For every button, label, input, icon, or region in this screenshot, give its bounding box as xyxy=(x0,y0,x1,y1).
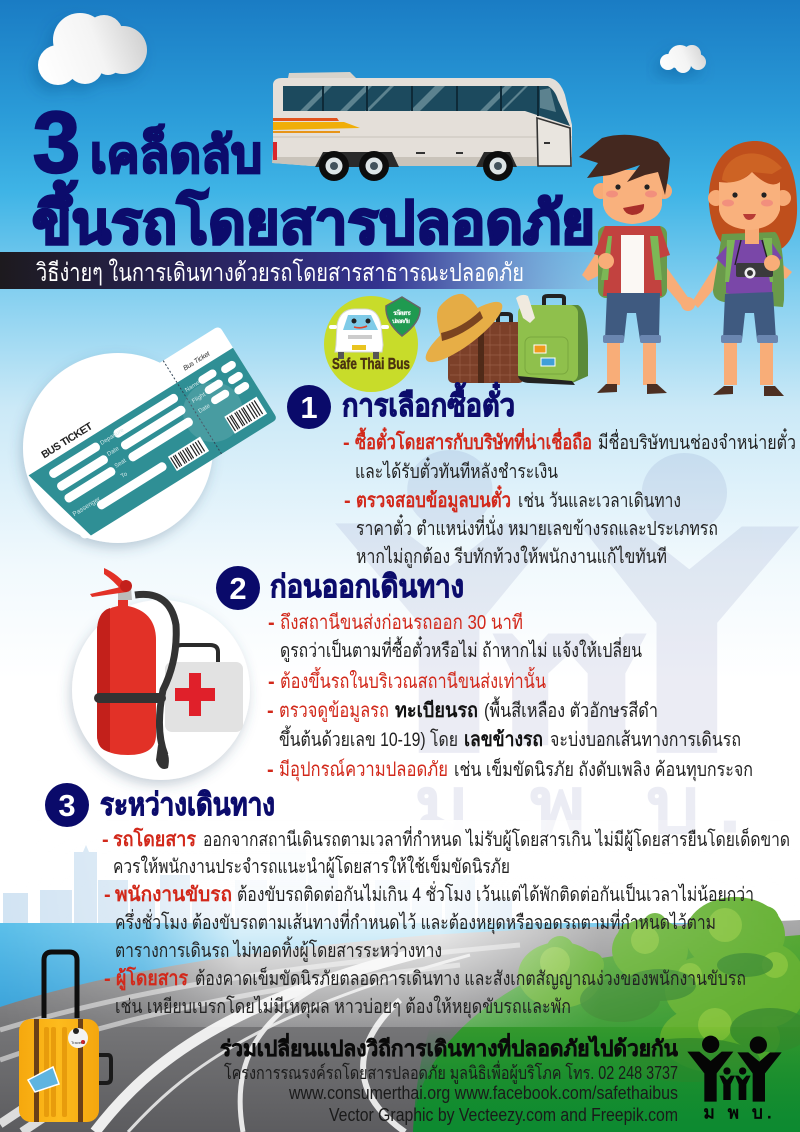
section 1 text: ราคาตั๋ว ตำแหน่งที่นั่ง หมายเลขข้างรถและประเภทรถ xyxy=(356,514,718,540)
section 1 text: เช่น วันและเวลาเดินทาง xyxy=(518,490,681,512)
safe thai bus logo: ปลอดภัย xyxy=(392,317,410,325)
section 3 text: ตารางการเดินรถ ไม่ทอดทิ้งผู้โดยสารระหว่างทาง xyxy=(115,936,442,963)
section 2 text xyxy=(267,612,753,782)
section 1 heading: การเลือกซื้อตั๋ว xyxy=(342,381,515,423)
cloud large xyxy=(38,13,147,85)
section 2 text: (พื้นสีเหลือง ตัวอักษรสีดำ xyxy=(484,696,658,722)
footer text: www.consumerthai.org www.facebook.com/safethaibus xyxy=(288,1083,678,1103)
subtitle band: วิธีง่ายๆ ในการเดินทางด้วยรถโดยสารสาธารณะปลอดภัย xyxy=(36,258,524,287)
section 2 text: - xyxy=(267,700,274,722)
ticket with white circle: Date xyxy=(106,446,121,458)
section 3 text: - xyxy=(104,968,111,990)
ticket with white circle: Departure xyxy=(100,427,126,447)
ticket with white circle: Date xyxy=(198,403,212,415)
title: เคล็ดลับ xyxy=(90,124,262,183)
section 3 text: รถโดยสาร xyxy=(113,827,196,851)
title: ขึ้นรถโดยสารปลอดภัย xyxy=(32,181,595,256)
section 2 text: ดูรถว่าเป็นตามที่ซื้อตั๋วหรือไม่ ถ้าหากไม่ แจ้งให้เปลี่ยน xyxy=(280,636,642,663)
section 2 text: มีอุปกรณ์ความปลอดภัย xyxy=(279,758,448,782)
section 2 text: ต้องขึ้นรถในบริเวณสถานีขนส่งเท่านั้น xyxy=(280,667,546,693)
ticket with white circle: BUS TICKET xyxy=(39,420,95,461)
section 2 heading: ก่อนออกเดินทาง xyxy=(270,569,464,604)
watermark logo xyxy=(335,450,799,850)
section 3 text: พนักงานขับรถ xyxy=(115,884,232,906)
yellow suitcase: Travel 2 xyxy=(71,1040,86,1045)
section 3 text: ควรให้พนักงานประจำรถแนะนำผู้โดยสารให้ใช้เข็มขัดนิรภัย xyxy=(113,854,510,879)
ticket with white circle: Flight xyxy=(191,392,207,405)
ticket with white circle: Name xyxy=(184,380,202,394)
ticket with white circle: Seat xyxy=(114,458,128,470)
bottom scene: sea, road and trees xyxy=(0,897,800,1132)
section 1 text: ซื้อตั๋วโดยสารกับบริษัทที่น่าเชื่อถือ xyxy=(355,427,592,454)
ticket with white circle: Passenger xyxy=(72,495,102,518)
bus illustration xyxy=(272,72,572,181)
title: 3 xyxy=(33,95,80,191)
section 3 heading: ระหว่างเดินทาง xyxy=(100,787,275,822)
safe thai bus logo xyxy=(324,296,420,392)
section 2 text: เลขข้างรถ xyxy=(464,728,543,751)
section 2 number badge xyxy=(216,566,260,610)
subtitle band xyxy=(0,252,610,289)
section 1 number badge: 1 xyxy=(300,390,318,425)
footer text: Vector Graphic by Vecteezy.com and Freepik.com xyxy=(329,1105,678,1125)
ticket with white circle: Bus Ticket xyxy=(182,350,212,372)
section 2 text: จะบ่งบอกเส้นทางการเดินรถ xyxy=(550,729,741,751)
ticket with white circle xyxy=(15,326,277,547)
section 3 text xyxy=(102,826,790,1019)
section 2 text: - xyxy=(268,612,275,634)
title xyxy=(32,95,595,256)
section 1 number badge xyxy=(287,385,331,429)
skyline xyxy=(3,838,512,925)
section 1 text xyxy=(343,427,796,569)
section 3 text: - xyxy=(104,884,111,906)
safe thai bus logo: รถโดยสาร xyxy=(393,309,412,317)
section 1 text: - xyxy=(343,432,350,454)
footer text xyxy=(220,1032,678,1125)
section 3 number badge: 3 xyxy=(58,788,76,823)
section 1 text: หากไม่ถูกต้อง รีบทักท้วงให้พนักงานแก้ไขทันที xyxy=(356,545,667,569)
boy character xyxy=(579,135,695,394)
section 2 text: - xyxy=(268,671,275,693)
footer text: ร่วมเปลี่ยนแปลงวิถีการเดินทางที่ปลอดภัยไปด้วยกัน xyxy=(220,1032,678,1061)
section 3 text: - xyxy=(102,829,109,851)
section 3 text: ผู้โดยสาร xyxy=(116,966,188,992)
safe thai bus logo: Safe Thai Bus xyxy=(332,356,410,373)
section 2 text: ถึงสถานีขนส่งก่อนรถออก 30 นาที xyxy=(280,612,523,634)
fire extinguisher and first aid illustration xyxy=(72,568,250,780)
section 3 text: เช่น เหยียบเบรกโดยไม่มีเหตุผล หาวบ่อยๆ ต้องให้หยุดขับรถและพัก xyxy=(115,995,571,1019)
foundation logo: ม พ บ. xyxy=(703,1102,772,1122)
section 2 text: - xyxy=(267,759,274,781)
section 2 text: ทะเบียนรถ xyxy=(395,699,478,722)
girl character xyxy=(692,141,797,396)
yellow suitcase xyxy=(19,952,111,1122)
foundation logo xyxy=(687,1036,782,1122)
watermark logo: ม พ บ. xyxy=(414,761,742,850)
footer text: โครงการรณรงค์รถโดยสารปลอดภัย มูลนิธิเพื่อผู้บริโภค โทร. 02 248 3737 xyxy=(224,1060,678,1084)
section 2 text: ตรวจดูข้อมูลรถ xyxy=(279,700,389,723)
section 1 text: - xyxy=(344,490,351,512)
cloud small xyxy=(660,45,706,73)
section 1 text: ตรวจสอบข้อมูลบนตั๋ว xyxy=(356,485,511,514)
section 3 number badge xyxy=(45,783,89,827)
section 2 number badge: 2 xyxy=(229,571,247,606)
luggage and hat xyxy=(419,293,588,385)
section 1 text: และได้รับตั๋วทันทีหลังชำระเงิน xyxy=(355,457,558,483)
section 2 text: ขึ้นต้นด้วยเลข 10-19) โดย xyxy=(279,725,458,751)
ticket with white circle: To xyxy=(120,471,129,480)
white fade behind section 3 text xyxy=(0,820,800,1027)
